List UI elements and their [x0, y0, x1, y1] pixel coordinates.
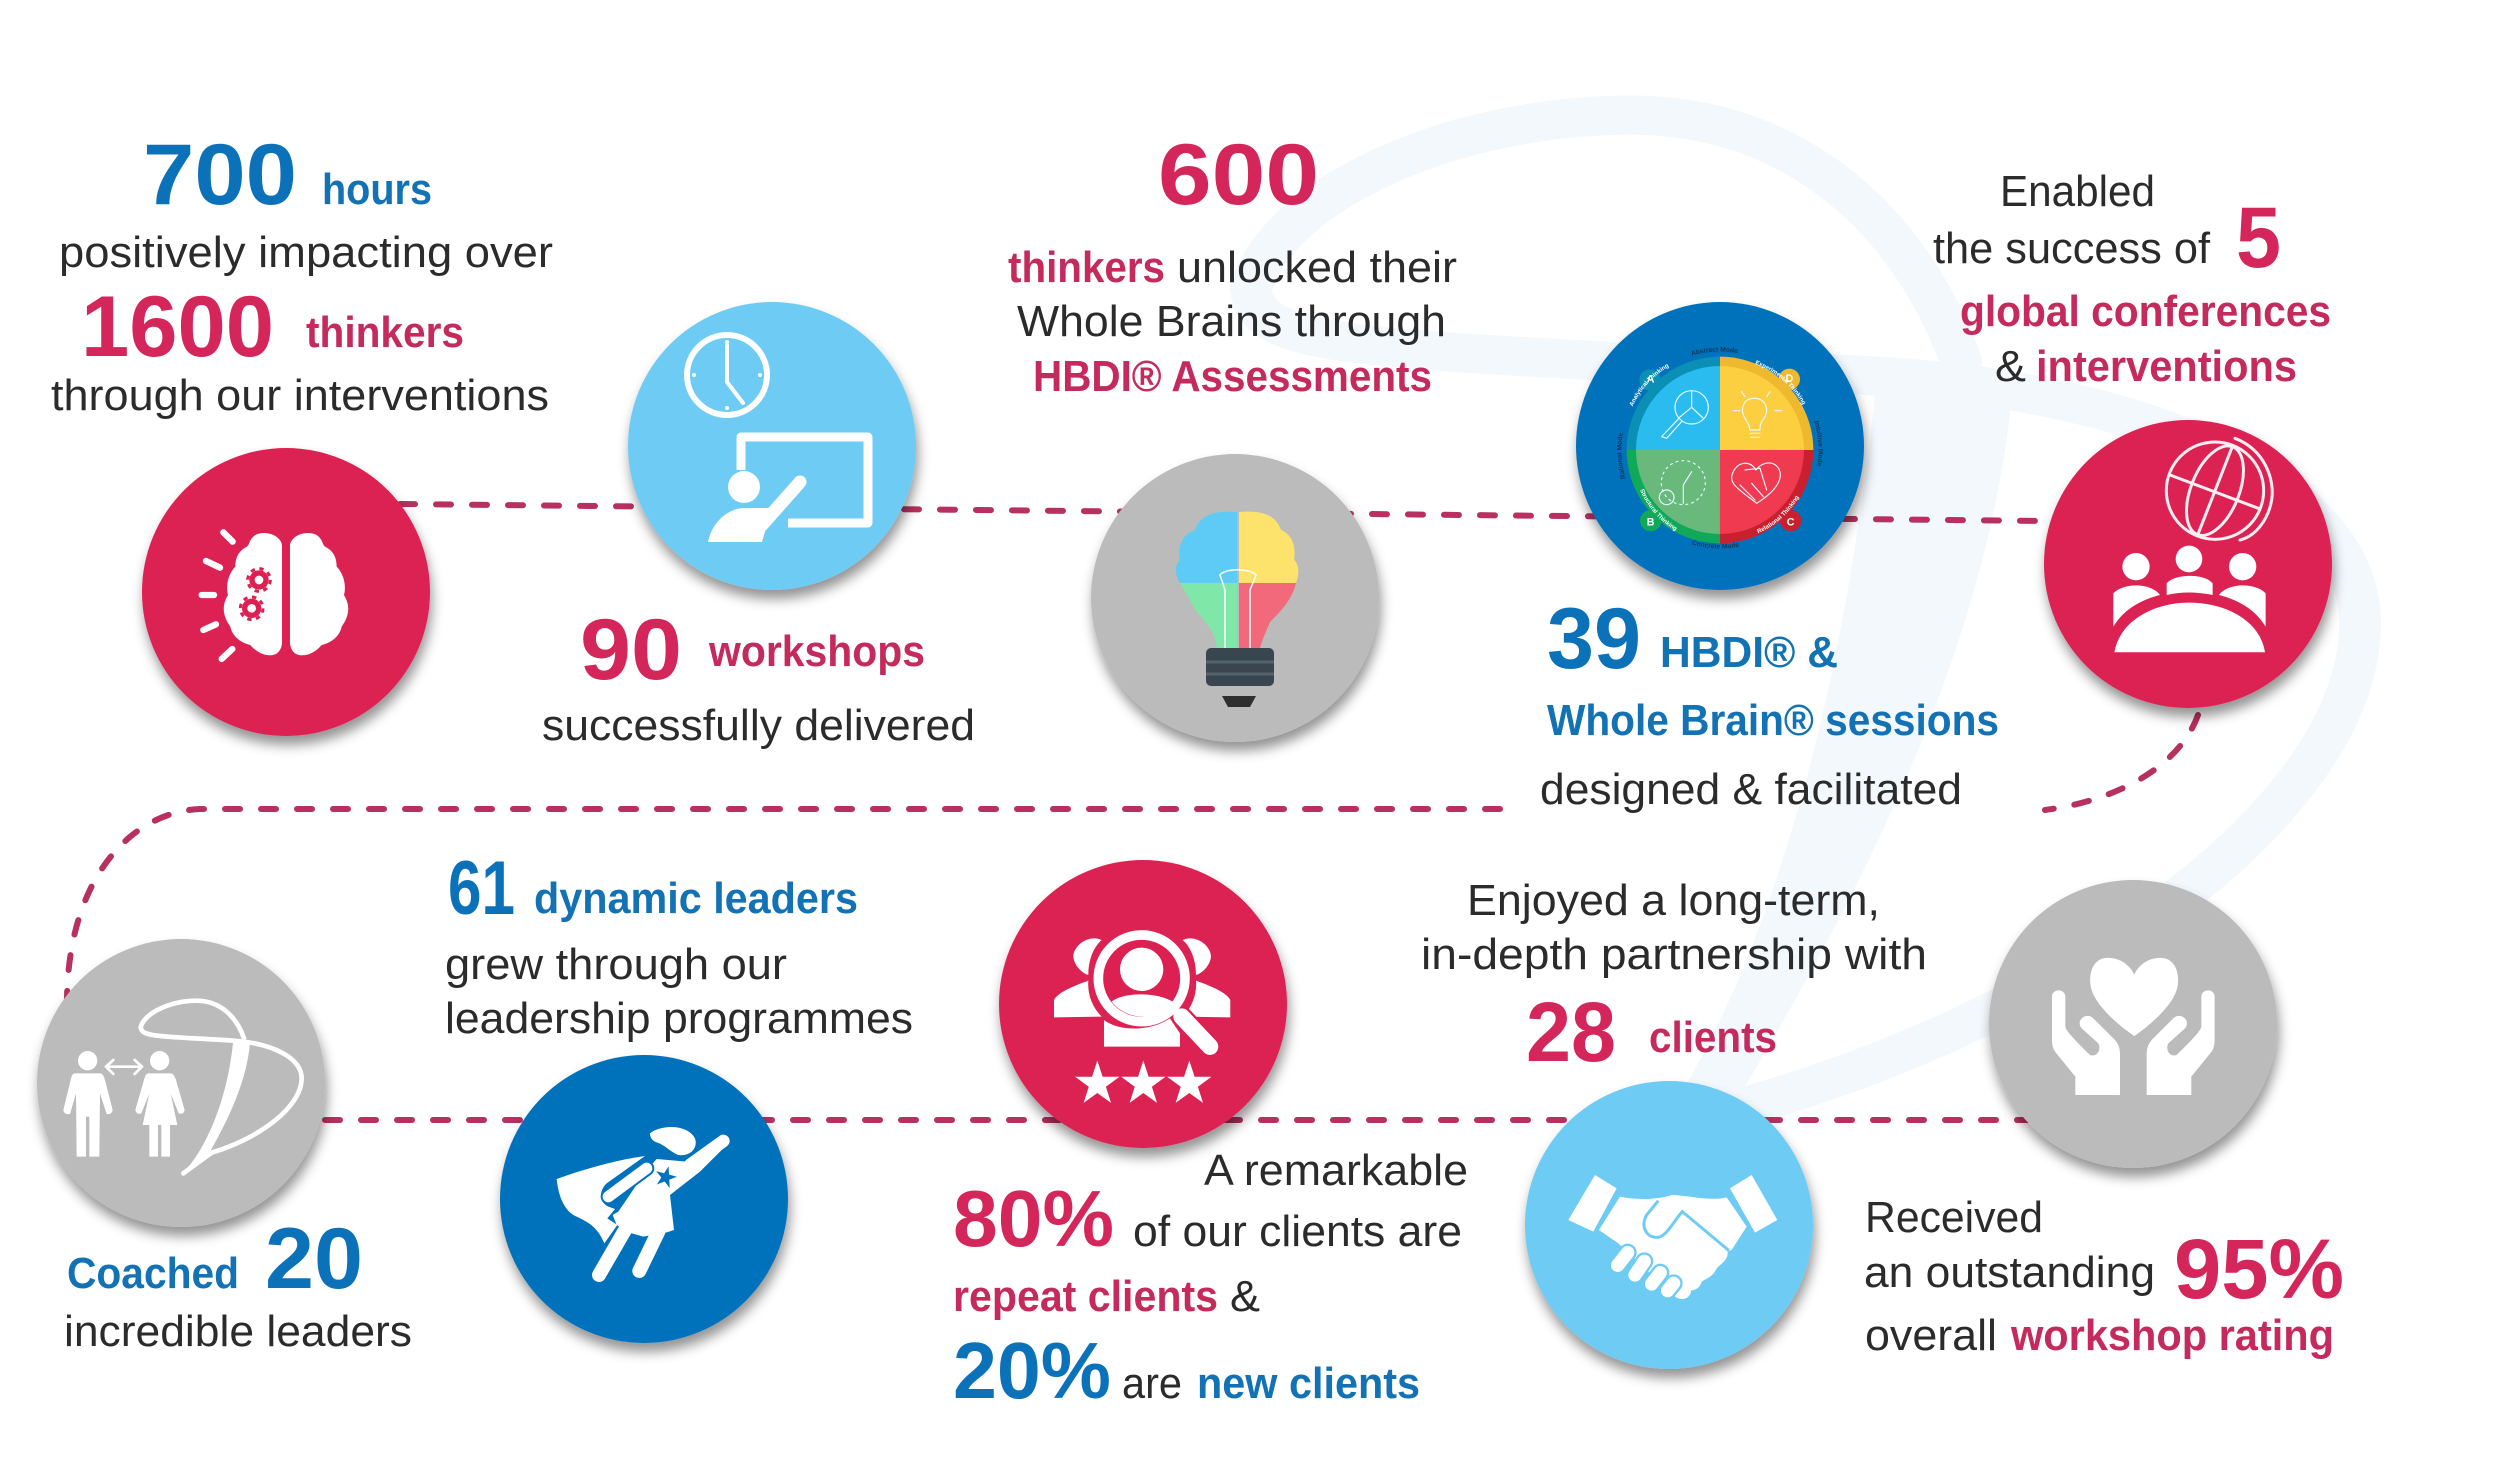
icon circle: HBDI whole brain wheel: Experimental Thinking — [1755, 360, 1806, 405]
text block: 700 hours, 1600 thinkers: 1600 — [81, 279, 274, 375]
text block: 95% rating: Received — [1865, 1193, 2043, 1242]
text block: 80% repeat and 20% new clients: are — [1122, 1359, 1182, 1408]
text block: 39 sessions: 39 — [1547, 591, 1641, 687]
text block: 61 dynamic leaders: grew through our — [445, 940, 787, 989]
text block: 90 workshops: successfully delivered — [542, 701, 975, 750]
text block: 700 hours, 1600 thinkers: through our interventions — [51, 371, 549, 420]
text block: 700 hours, 1600 thinkers: hours — [322, 165, 432, 214]
icon circle: HBDI whole brain wheel: D — [1785, 373, 1793, 385]
text block: 95% rating — [1864, 1193, 2344, 1360]
icon circle: HBDI whole brain wheel: Abstract Mode — [1692, 346, 1738, 356]
text block: 600 thinkers: HBDI® Assessments — [1033, 352, 1432, 401]
text block: 61 dynamic leaders: 61 — [448, 846, 515, 931]
icon circle: hands holding heart — [1989, 880, 2277, 1168]
icon circle: colourful light bulb — [1091, 454, 1379, 742]
icon circle: superhero — [500, 1055, 788, 1343]
icon circle: HBDI whole brain wheel: B — [1647, 517, 1655, 529]
text block: coached 20: Coached — [67, 1249, 239, 1298]
text block: 600 thinkers: 600 — [1158, 127, 1319, 223]
text block: 39 sessions: HBDI® & — [1660, 628, 1838, 677]
text block: 600 thinkers: Whole Brains through — [1017, 297, 1446, 346]
text block: 95% rating: overall — [1865, 1311, 1997, 1360]
text block: 80% repeat and 20% new clients: 20% — [953, 1326, 1111, 1415]
text block: 90 workshops — [542, 602, 975, 750]
icon circle: brain with gears — [142, 448, 430, 736]
text block: 61 dynamic leaders — [445, 846, 913, 1043]
icon circle: HBDI whole brain wheel: Relational Thinking — [1756, 496, 1800, 534]
text block: 600 thinkers: thinkers — [1008, 243, 1165, 292]
icon circle: HBDI whole brain wheel: Intuitive Mode — [1814, 420, 1824, 466]
text block: 28 clients: Enjoyed a long-term, — [1467, 876, 1880, 925]
text block: 80% repeat and 20% new clients: A remarkable — [1204, 1146, 1468, 1195]
dashed connector: right curve — [2045, 715, 2198, 810]
icon circle: HBDI whole brain wheel: Analytical Thinking — [1630, 364, 1669, 406]
text block: 80% repeat and 20% new clients: new clients — [1197, 1359, 1420, 1408]
text block: 700 hours, 1600 thinkers: thinkers — [306, 308, 464, 357]
icon circle: global conference — [2044, 420, 2332, 708]
text block: 5 global conferences: the success of — [1933, 224, 2211, 273]
text block: 5 global conferences: 5 — [2236, 190, 2281, 286]
dashed connector: bottom row — [325, 1117, 2040, 1123]
text block: 80% repeat and 20% new clients: repeat clients — [953, 1272, 1218, 1321]
icon circle: HBDI whole brain wheel — [1570, 302, 1874, 607]
icon circle: HBDI whole brain wheel: Structural Thinking — [1640, 489, 1677, 532]
dashed connector: middle row and left curve — [67, 809, 1500, 1000]
icon circle: coaching figures with swoosh — [37, 939, 325, 1227]
text block: coached 20 — [64, 1211, 412, 1356]
text block: 5 global conferences: interventions — [2036, 342, 2297, 391]
text block: 95% rating: workshop rating — [2010, 1311, 2334, 1360]
text block: 90 workshops: 90 — [580, 602, 682, 698]
text block: 28 clients: in-depth partnership with — [1421, 930, 1927, 979]
text block: 90 workshops: workshops — [708, 627, 925, 676]
text block: 28 clients — [1421, 876, 1927, 1079]
text block: 61 dynamic leaders: leadership programmes — [445, 994, 913, 1043]
icon circle: client rating magnifier — [999, 860, 1287, 1148]
text block: 600 thinkers: unlocked their — [1177, 243, 1457, 292]
text block: 700 hours, 1600 thinkers: 700 — [143, 127, 297, 223]
icon circle: workshop presenter and clock — [628, 302, 916, 590]
text block: 5 global conferences — [1933, 167, 2331, 391]
text block: 28 clients: 28 — [1526, 985, 1616, 1079]
icon circle: HBDI whole brain wheel: A — [1647, 374, 1655, 386]
text block: 5 global conferences: Enabled — [2000, 167, 2155, 216]
icon circle: HBDI whole brain wheel: C — [1787, 517, 1795, 529]
dashed connector: top row — [400, 504, 2045, 521]
text block: 700 hours, 1600 thinkers — [51, 127, 553, 420]
text block: 61 dynamic leaders: dynamic leaders — [534, 874, 858, 923]
text block: 80% repeat and 20% new clients: 80% — [953, 1174, 1114, 1263]
text block: 95% rating: 95% — [2174, 1222, 2344, 1316]
text block: 80% repeat and 20% new clients: & — [1230, 1272, 1260, 1321]
background watermark swoosh — [1251, 115, 2360, 1179]
text block: 700 hours, 1600 thinkers: positively impacting over — [59, 228, 553, 277]
text block: 95% rating: an outstanding — [1864, 1248, 2155, 1297]
text block: 5 global conferences: global conferences — [1960, 287, 2331, 336]
icon circle: HBDI whole brain wheel: Concrete Mode — [1692, 540, 1739, 548]
text block: 600 thinkers — [1008, 127, 1457, 401]
text block: 80% repeat and 20% new clients: of our clients are — [1133, 1207, 1462, 1256]
text block: 5 global conferences: & — [1995, 342, 2026, 391]
text block: 39 sessions: designed & facilitated — [1540, 765, 1962, 814]
text block: 28 clients: clients — [1649, 1013, 1777, 1062]
text block: 39 sessions: Whole Brain® sessions — [1547, 696, 1999, 745]
text block: coached 20: 20 — [265, 1211, 363, 1307]
icon circle: HBDI whole brain wheel: Rational Mode — [1616, 433, 1626, 480]
icon circle: handshake — [1525, 1081, 1813, 1369]
text block: coached 20: incredible leaders — [64, 1307, 412, 1356]
text block: 39 sessions — [1540, 591, 1999, 814]
text block: 80% repeat and 20% new clients — [953, 1146, 1468, 1415]
